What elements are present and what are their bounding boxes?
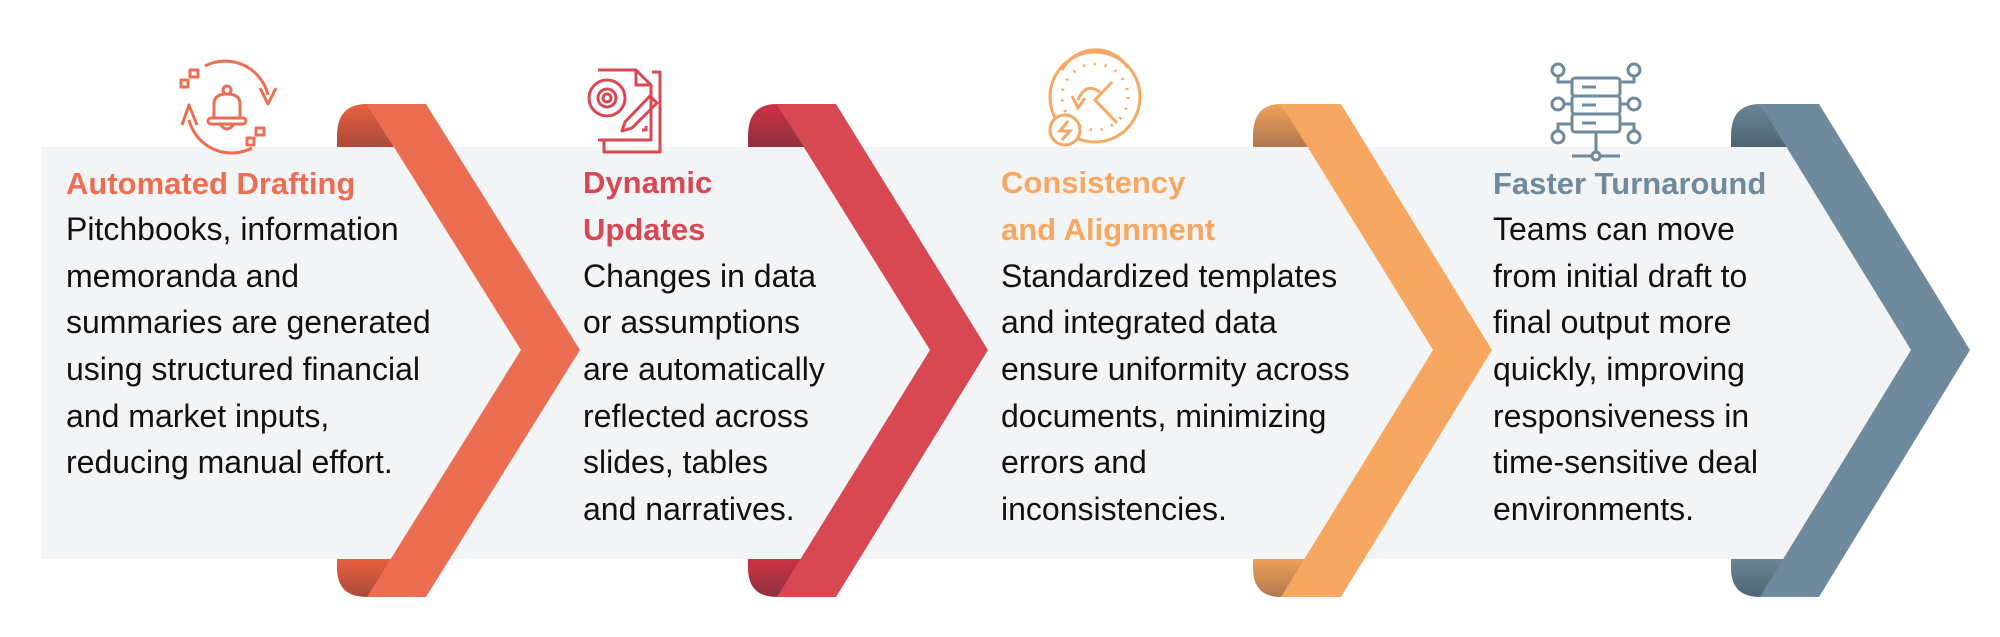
panel 3 text: ensure uniformity across xyxy=(1001,351,1350,387)
panel 3 text: inconsistencies. xyxy=(1001,491,1227,527)
panel 4 text: final output more xyxy=(1493,304,1731,340)
panel 4 text xyxy=(1493,166,1766,527)
panel 3 text: Standardized templates xyxy=(1001,258,1337,294)
icon: gear document xyxy=(589,70,660,152)
chevron 1 xyxy=(337,104,580,597)
panel 2 text: Updates xyxy=(583,212,705,247)
panel 3 text: Consistency xyxy=(1001,165,1186,200)
panel 1 text: summaries are generated xyxy=(66,304,431,340)
panel 2 text: reflected across xyxy=(583,398,809,434)
panel 4 text: time-sensitive deal xyxy=(1493,444,1758,480)
chevron 4 xyxy=(1731,104,1970,597)
panel 2 text xyxy=(583,165,825,527)
panel 4 text: Teams can move xyxy=(1493,211,1735,247)
panel 1 text: using structured financial xyxy=(66,351,420,387)
panel 3 text: and integrated data xyxy=(1001,304,1277,340)
panel 3 text xyxy=(1001,165,1350,527)
panel 1 text: Pitchbooks, information xyxy=(66,211,399,247)
chevron 2 xyxy=(748,104,988,597)
panel 4 text: quickly, improving xyxy=(1493,351,1745,387)
panel 4 text: responsiveness in xyxy=(1493,398,1749,434)
panel 2 text: Changes in data xyxy=(583,258,816,294)
panel 2 text: and narratives. xyxy=(583,491,795,527)
panel 4 text: Faster Turnaround xyxy=(1493,166,1766,201)
panel 3 text: documents, minimizing xyxy=(1001,398,1326,434)
panel 1 text: and market inputs, xyxy=(66,398,329,434)
panel 2 text: are automatically xyxy=(583,351,825,387)
panel 2 text: Dynamic xyxy=(583,165,712,200)
chevron 3 xyxy=(1253,104,1492,597)
panel 3 text: errors and xyxy=(1001,444,1147,480)
panel 4 text: from initial draft to xyxy=(1493,258,1747,294)
icon: speed dial with lightning xyxy=(1050,50,1140,145)
panel 1 text: Automated Drafting xyxy=(66,166,355,201)
panel 1 text xyxy=(66,166,431,480)
panel 2 text: or assumptions xyxy=(583,304,800,340)
panel 4 text: environments. xyxy=(1493,491,1694,527)
panel 1 text: reducing manual effort. xyxy=(66,444,393,480)
panel 3 text: and Alignment xyxy=(1001,212,1215,247)
icon: bell with cycle arrows xyxy=(181,61,276,153)
panel 1 text: memoranda and xyxy=(66,258,299,294)
panel 2 text: slides, tables xyxy=(583,444,768,480)
background band xyxy=(41,147,1911,559)
icon: server network xyxy=(1552,64,1640,160)
